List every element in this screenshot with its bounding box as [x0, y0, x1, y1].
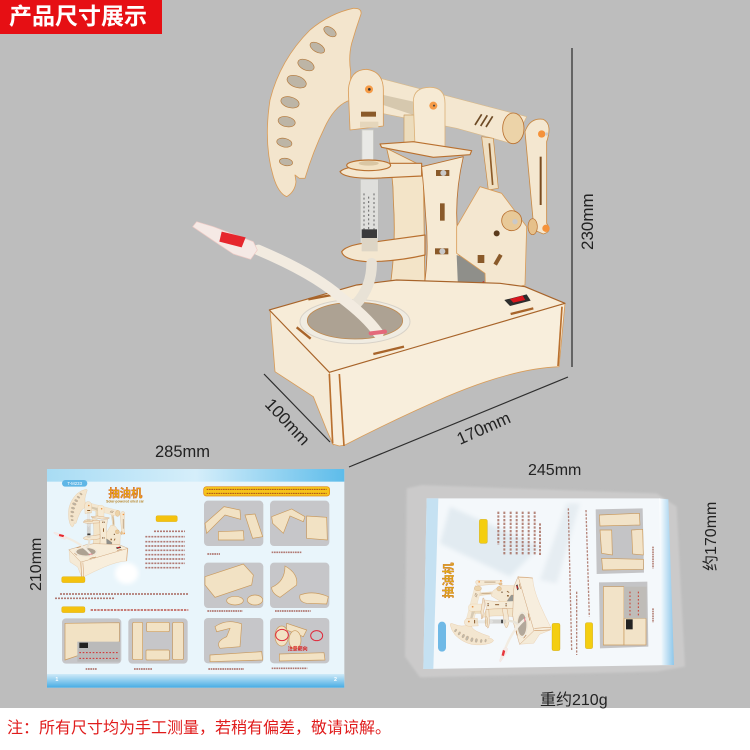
step captions — [86, 552, 311, 669]
bag title: 抽油机 — [441, 562, 456, 598]
manual title: Solar-powered oiled car — [106, 499, 145, 503]
dimension: length 170mm — [349, 377, 568, 467]
bag model tag — [438, 622, 446, 652]
footnote: 注：所有尺寸均为手工测量，若稍有偏差，敬请谅解。 — [7, 719, 391, 737]
bag yellow tags — [479, 519, 593, 651]
syringe top tube — [362, 130, 373, 162]
pump head block — [348, 69, 383, 130]
wooden parts in step photos — [65, 507, 328, 662]
manual title — [106, 486, 145, 503]
dimension: bag height 170mm: 约170mm — [702, 502, 720, 571]
dimension: manual height 210mm: 210mm — [28, 538, 45, 591]
switch — [504, 294, 531, 306]
base left face — [270, 310, 333, 445]
panel: instruction manual — [47, 469, 344, 688]
dimension: manual width 285mm: 285mm — [155, 443, 210, 461]
bag wooden parts — [599, 513, 646, 645]
manual model tag: T-M233 — [67, 481, 83, 486]
beam — [382, 79, 527, 144]
manual intro text block — [55, 531, 188, 598]
silicone tube — [258, 250, 385, 333]
bag step photos — [596, 508, 648, 648]
base top face — [269, 280, 565, 372]
manual title: 抽油机 — [108, 486, 143, 500]
check valve — [193, 222, 257, 259]
manual pumpjack picture — [54, 489, 128, 577]
crank arm and wheel — [503, 113, 550, 235]
yellow section tags — [62, 516, 177, 613]
bag step captions — [650, 547, 655, 623]
panel: packaged manual in plastic bag — [405, 485, 685, 677]
base slots — [297, 295, 533, 354]
dimension: height 230mm: 230mm — [578, 193, 597, 250]
step warning marks — [276, 629, 323, 641]
top platform — [380, 142, 472, 157]
bag pumpjack picture — [450, 576, 551, 662]
upper platform — [340, 160, 422, 178]
title banner — [0, 0, 162, 34]
step warning caption: 注意朝向 — [288, 645, 308, 652]
dimension: width 100mm — [261, 374, 330, 449]
dimension: length 170mm: 170mm — [454, 408, 513, 449]
electronics parts tray — [77, 642, 120, 662]
gearbox — [457, 187, 527, 295]
rear support rod — [482, 137, 498, 190]
title banner: 产品尺寸展示 — [9, 3, 147, 29]
column back panel — [387, 148, 425, 298]
base corner strips — [329, 307, 562, 446]
manual page numbers — [55, 677, 337, 683]
step photos — [62, 501, 329, 664]
oil well — [300, 300, 410, 344]
footer strip — [0, 708, 750, 750]
manual gold step banner — [204, 487, 330, 496]
syringe — [360, 179, 378, 252]
dimension: width 100mm: 100mm — [261, 395, 314, 449]
product photo: wooden pumpjack model — [193, 8, 565, 446]
front curved column — [419, 157, 463, 318]
manual page numbers: 2 — [334, 677, 337, 683]
base front face — [329, 303, 565, 446]
manual slogan — [91, 607, 188, 612]
manual model tag — [62, 480, 87, 487]
bag electronics — [624, 587, 647, 629]
dimension: bag width 245mm: 245mm — [528, 462, 581, 479]
weight label: 重约210g — [540, 691, 608, 709]
manual page numbers: 1 — [55, 677, 58, 683]
lower platform — [342, 235, 425, 262]
bag text block — [498, 508, 589, 655]
horse head — [267, 8, 361, 197]
front pivot post — [404, 87, 445, 147]
